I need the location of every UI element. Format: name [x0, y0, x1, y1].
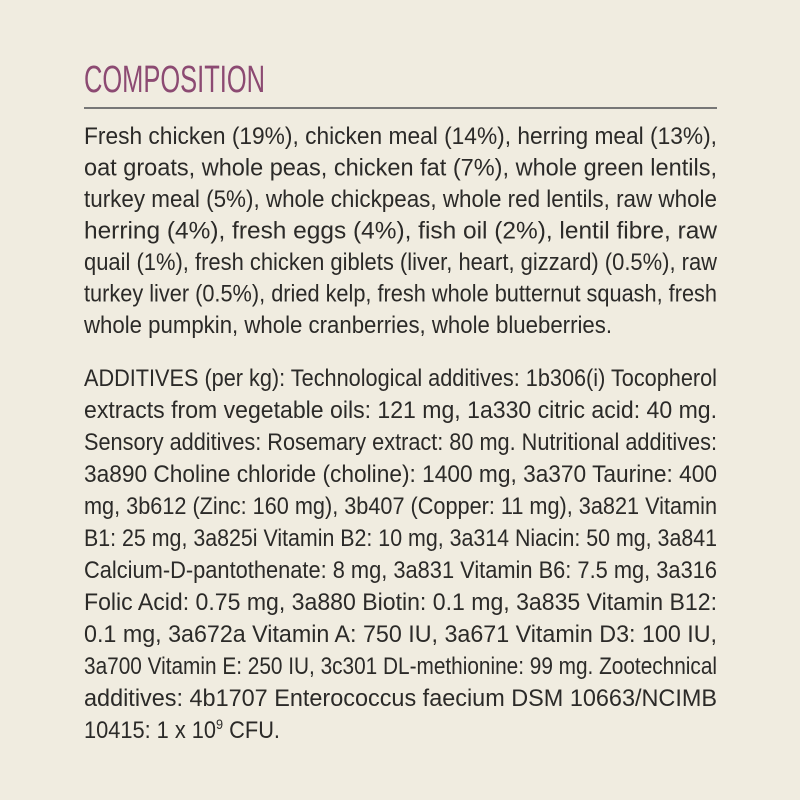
text block: additives: Calcium-D-pantothenate: 8 mg, 3a831 Vitamin B6: 7.5 mg, 3a316: [84, 557, 717, 584]
title: COMPOSITION: [84, 59, 265, 101]
text block: additives: 3a700 Vitamin E: 250 IU, 3c301 DL-methionine: 99 mg. Zootechnical: [84, 653, 717, 680]
text block: additives: B1: 25 mg, 3a825i Vitamin B2: 10 mg, 3a314 Niacin: 50 mg, 3a841: [84, 525, 717, 552]
text block: additives: 3a890 Choline chloride (choline): 1400 mg, 3a370 Taurine: 400: [84, 461, 717, 488]
text block: additives: 10415: 1 x 10: [84, 717, 229, 744]
text block: additives: Folic Acid: 0.75 mg, 3a880 Biotin: 0.1 mg, 3a835 Vitamin B12:: [84, 589, 717, 616]
text block: additives: additives: 4b1707 Enterococcus faecium DSM 10663/NCIMB: [84, 685, 717, 712]
text block: additives: extracts from vegetable oils: 121 mg, 1a330 citric acid: 40 mg.: [84, 397, 717, 424]
text block: ingredients: herring (4%), fresh eggs (4%), fish oil (2%), lentil fibre, raw: [84, 218, 718, 244]
text block: additives: Sensory additives: Rosemary extract: 80 mg. Nutritional additives:: [84, 429, 717, 456]
text block: additives: mg, 3b612 (Zinc: 160 mg), 3b407 (Copper: 11 mg), 3a821 Vitamin: [84, 493, 717, 520]
text block: ingredients: oat groats, whole peas, chicken fat (7%), whole green lentils,: [84, 154, 717, 182]
text block: additives: 0.1 mg, 3a672a Vitamin A: 750 IU, 3a671 Vitamin D3: 100 IU,: [84, 621, 717, 648]
text block: ingredients: [83, 123, 718, 339]
text block: additives: CFU.: [223, 717, 280, 744]
text block: additives: [84, 365, 717, 744]
text block: additives: 9: [216, 716, 223, 732]
text block: ingredients: turkey meal (5%), whole chickpeas, whole red lentils, raw whole: [84, 186, 717, 213]
text block: ingredients: Fresh chicken (19%), chicken meal (14%), herring meal (13%),: [84, 123, 717, 150]
text block: additives: ADDITIVES (per kg): Technological additives: 1b306(i) Tocopherol: [84, 365, 717, 392]
text block: ingredients: turkey liver (0.5%), dried kelp, fresh whole butternut squash, fresh: [84, 280, 717, 308]
text block: ingredients: whole pumpkin, whole cranberries, whole blueberries.: [83, 312, 612, 339]
text block: ingredients: quail (1%), fresh chicken giblets (liver, heart, gizzard) (0.5%), raw: [84, 249, 718, 276]
